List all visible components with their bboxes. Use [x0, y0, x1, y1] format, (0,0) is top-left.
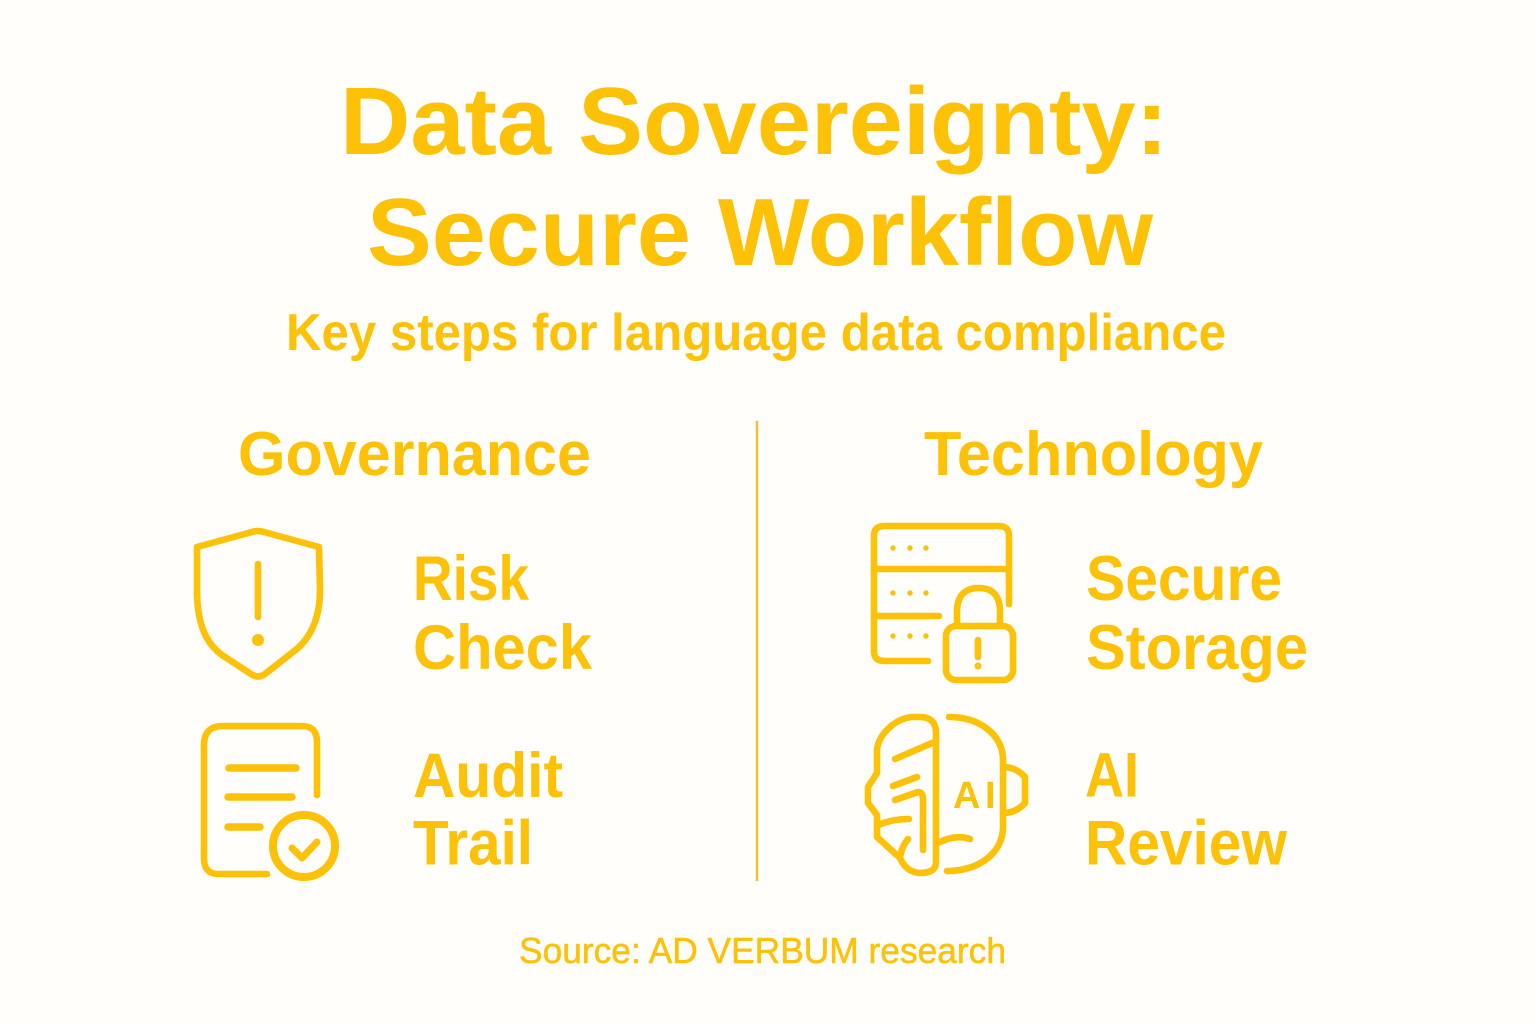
icon: server with padlock: [874, 526, 1013, 680]
label: Secure Storage: [1086, 544, 1308, 683]
icon: AI head: [868, 717, 1025, 873]
label: Secure Storage: Storage: [1086, 613, 1308, 683]
label: Risk Check: [413, 544, 593, 683]
heading: Technology: Technology: [924, 420, 1264, 489]
icon: AI head: AI: [953, 775, 996, 817]
label: Risk Check: Risk: [413, 544, 530, 614]
label: AI Review: [1085, 740, 1288, 878]
subtitle: Key steps for language data compliance: [286, 304, 1226, 362]
title: Data Sovereignty:: [340, 68, 1168, 175]
source note: Source: AD VERBUM research: [519, 930, 1006, 971]
label: Audit Trail: [413, 741, 563, 878]
heading: Governance: Governance: [238, 420, 591, 489]
label: Risk Check: Check: [413, 613, 593, 683]
label: Audit Trail: Audit: [413, 741, 563, 811]
icon: shield with exclamation mark: [197, 531, 320, 676]
label: AI Review: AI: [1085, 740, 1139, 810]
label: Secure Storage: Secure: [1086, 544, 1282, 614]
label: AI Review: Review: [1085, 808, 1288, 878]
title: Secure Workflow: [367, 179, 1153, 286]
title: [340, 68, 1168, 286]
label: Audit Trail: Trail: [413, 808, 533, 878]
icon: document with check mark: [204, 726, 335, 877]
